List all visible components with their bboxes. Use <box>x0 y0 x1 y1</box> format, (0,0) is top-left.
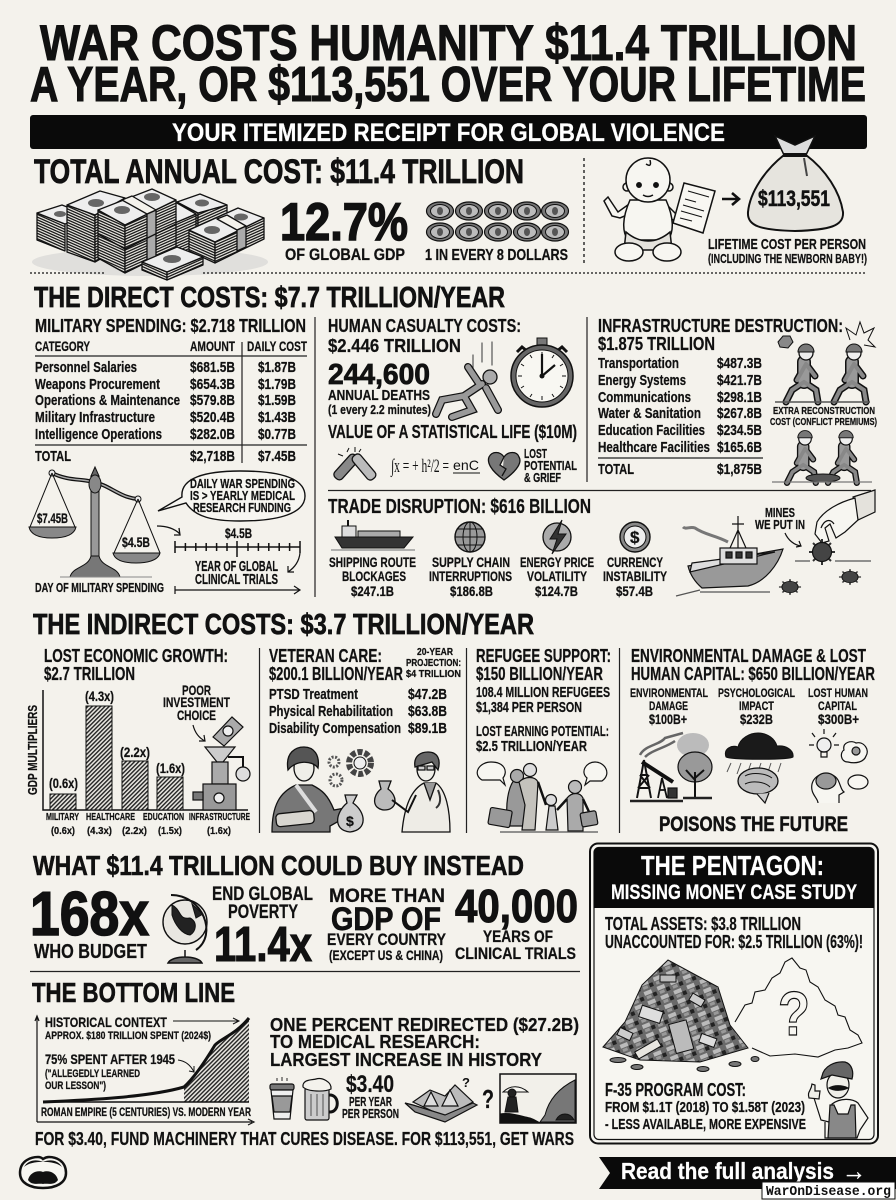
heading: bottom line: THE BOTTOM LINE <box>32 977 235 1008</box>
table: military spending breakdown: Personnel Salaries <box>35 359 137 376</box>
sub-stat: environmental damage: $100B+ <box>649 711 687 727</box>
caption: 1 in every 8 dollars: 1 IN EVERY 8 DOLLARS <box>425 247 568 264</box>
table: infrastructure costs: $421.7B <box>717 372 762 389</box>
text: F-35 program cost <box>605 1080 806 1133</box>
stat: $3.40 per year: PER YEAR <box>349 1095 392 1109</box>
table: infrastructure costs: Energy Systems <box>598 372 686 389</box>
callout: daily war spending: RESEARCH FUNDING <box>193 500 291 515</box>
caption: lost potential and grief: LOST <box>524 447 547 461</box>
heading: human casualty costs: $2.446 TRILLION <box>328 335 461 356</box>
table: military spending breakdown: Weapons Procurement <box>35 376 160 393</box>
stat: 168x WHO budget: 168x <box>30 880 149 949</box>
subtitle banner <box>30 115 867 149</box>
caption: lost potential and grief <box>524 447 577 485</box>
callout: poor investment choice: CHOICE <box>177 707 216 723</box>
chart: historical context curve <box>35 1014 254 1125</box>
table: infrastructure costs: $165.6B <box>717 439 762 456</box>
note: 20-year projection <box>406 647 461 680</box>
icon: stacks of money <box>32 189 268 280</box>
table: infrastructure costs: $1,875B <box>717 461 762 478</box>
table: military spending breakdown: $1.43B <box>258 409 296 426</box>
icon: currency coin: $ <box>630 528 640 547</box>
panel: military spending <box>29 315 307 595</box>
table: infrastructure costs: Healthcare Facilities <box>598 439 710 456</box>
list: veteran costs <box>269 686 447 737</box>
panel: human casualty costs <box>328 315 577 485</box>
callout: daily war spending: DAILY WAR SPENDING <box>190 476 295 491</box>
bar chart: GDP multipliers: (2.2x) <box>120 744 150 760</box>
heading: value of a statistical life: VALUE OF A STATISTICAL LIFE ($10M) <box>328 422 577 442</box>
chart: historical context curve: ROMAN EMPIRE (5 CENTURIES) VS. MODERN YEAR <box>41 1107 251 1119</box>
table: military spending breakdown: CATEGORY <box>35 338 90 354</box>
bar chart: GDP multipliers: (0.6x) <box>49 775 78 791</box>
note: 20-year projection: 20-YEAR <box>417 647 454 658</box>
stat: 40,000 years of trials: YEARS OF <box>483 928 553 946</box>
bar chart: GDP multipliers: (2.2x) <box>122 825 147 837</box>
text: energy price volatility: VOLATILITY <box>527 568 587 584</box>
icon: balance scale: $4.5B <box>122 535 150 550</box>
stats: refugees: 108.4 MILLION REFUGEES <box>476 684 610 701</box>
chart: historical context curve: OUR LESSON") <box>45 1080 106 1092</box>
icon: money bag: $113,551 <box>758 186 830 211</box>
takeaway line: FOR $3.40, FUND MACHINERY THAT CURES DISEASE. FOR $113,551, GET WARS <box>35 1129 574 1149</box>
heading: one percent redirected <box>270 1014 579 1070</box>
table: military spending breakdown <box>35 338 307 465</box>
table: military spending breakdown: $282.0B <box>190 426 235 443</box>
text: currency instability: CURRENCY <box>607 554 663 570</box>
table: military spending breakdown: DAILY COST <box>247 338 307 354</box>
table: infrastructure costs: Water & Sanitation <box>598 405 701 422</box>
icon: workers digging <box>772 431 872 483</box>
axis label: GDP multipliers: GDP MULTIPLIERS <box>25 705 40 795</box>
list: veteran costs: $47.2B <box>408 686 447 703</box>
callout: poor investment choice: POOR <box>182 682 211 698</box>
heading: one percent redirected: TO MEDICAL RESEARCH: <box>270 1031 480 1052</box>
text: shipping route blockages: BLOCKAGES <box>342 568 406 584</box>
heading: direct costs: THE DIRECT COSTS: $7.7 TRILLION/YEAR <box>34 282 505 314</box>
table: military spending breakdown: $1.79B <box>258 376 296 393</box>
stat: annual deaths: ANNUAL DEATHS <box>328 387 430 404</box>
panel: infrastructure destruction <box>598 315 877 483</box>
panel: Pentagon case study <box>590 844 878 1144</box>
icon: beer mug <box>303 1079 337 1120</box>
panel: lost economic growth <box>25 646 250 837</box>
icon: war scene <box>500 1074 576 1123</box>
icon: running workers and explosion <box>775 322 875 402</box>
bar chart: GDP multipliers: (1.6x) <box>207 825 231 837</box>
sub-stat: environmental damage <box>630 686 708 727</box>
table: military spending breakdown: $520.4B <box>190 409 235 426</box>
heading: veteran care: VETERAN CARE: <box>269 646 382 666</box>
icon: broken test tubes <box>332 447 377 482</box>
note: 20-year projection: PROJECTION: <box>406 658 461 669</box>
icon: pile of money <box>603 960 759 1072</box>
button: read the full analysis: → <box>842 1156 866 1186</box>
icon: missing pile outline <box>735 958 862 1057</box>
button: read the full analysis <box>599 1156 896 1189</box>
icon: nachos: ? <box>462 1075 470 1090</box>
text: shipping route blockages <box>329 554 416 599</box>
bar chart: GDP multipliers: INFRASTRUCTURE <box>189 811 250 823</box>
text: shipping route blockages: $247.1B <box>351 583 394 599</box>
timeline: year of clinical trials <box>175 525 300 594</box>
arrow: scale to timeline <box>157 526 180 535</box>
heading: what could buy: WHAT $11.4 TRILLION COULD BUY INSTEAD <box>33 850 524 881</box>
stat: 12.7 percent: OF GLOBAL GDP <box>285 245 405 264</box>
heading: refugee support: REFUGEE SUPPORT: <box>476 646 611 666</box>
table: infrastructure costs: Education Facilities <box>598 422 705 439</box>
stats: refugees <box>476 684 610 755</box>
table: military spending breakdown: $0.77B <box>258 426 296 443</box>
table: military spending breakdown: Intelligence Operations <box>35 426 162 443</box>
table: infrastructure costs: $234.5B <box>717 422 762 439</box>
table: infrastructure costs <box>598 355 763 478</box>
icon: refugee family <box>477 762 607 832</box>
sub-stat: psychological impact <box>718 686 795 727</box>
note: 20-year projection: $4 TRILLION <box>406 669 461 680</box>
stat: 40,000 years of trials <box>455 880 578 963</box>
text: energy price volatility <box>520 554 594 599</box>
panel: refugee support <box>476 646 611 832</box>
title <box>30 15 866 112</box>
list: veteran costs: PTSD Treatment <box>269 686 358 703</box>
heading: infrastructure destruction: $1.875 TRILLION <box>598 333 715 354</box>
icon: balance scale: $7.45B <box>37 511 68 526</box>
label: mines we put in: MINES <box>765 505 795 520</box>
list: veteran costs: Disability Compensation <box>269 720 401 737</box>
table: military spending breakdown: AMOUNT <box>190 338 235 354</box>
chart: historical context curve: HISTORICAL CONTEXT <box>45 1014 167 1030</box>
header: the Pentagon <box>594 848 874 908</box>
caption: poisons the future: POISONS THE FUTURE <box>659 813 848 836</box>
table: military spending breakdown: $2,718B <box>190 448 235 465</box>
list: veteran costs: $63.8B <box>408 703 447 720</box>
sub-stat: lost human capital: CAPITAL <box>818 699 857 713</box>
sub-stat: lost human capital <box>808 686 868 727</box>
bar chart: GDP multipliers: HEALTHCARE <box>86 811 135 823</box>
sub-stat: environmental damage: ENVIRONMENTAL <box>630 686 708 700</box>
stat: more than GDP <box>327 885 446 963</box>
bar chart: GDP multipliers: (1.5x) <box>158 825 182 837</box>
heading: infrastructure destruction <box>598 315 843 354</box>
panel: veteran care <box>269 646 461 832</box>
icon: currency coin <box>620 522 650 552</box>
caption: lost potential and grief: & GRIEF <box>524 471 561 485</box>
icon: oil rig and tree <box>630 733 712 801</box>
label: mines we put in <box>755 505 805 547</box>
icon: hand with mine <box>779 490 875 595</box>
panel: what $11.4 trillion could buy <box>30 850 578 972</box>
icon: globe <box>455 522 485 552</box>
icon: gears <box>329 752 371 786</box>
callout: daily war spending: IS > YEARLY MEDICAL <box>190 488 295 503</box>
stat: more than GDP: MORE THAN <box>329 885 445 907</box>
table: military spending breakdown: $7.45B <box>258 448 296 465</box>
icon: stopwatch <box>511 338 573 407</box>
arrow: baby to bag <box>722 193 739 205</box>
heading: military spending: MILITARY SPENDING: $2.718 TRILLION <box>35 315 306 336</box>
stat: $3.40 per year <box>342 1071 399 1121</box>
stats: assets: TOTAL ASSETS: $3.8 TRILLION <box>605 914 801 934</box>
text: currency instability: INSTABILITY <box>603 568 667 584</box>
icon: investment machine <box>193 717 250 810</box>
chart: historical context curve: APPROX. $180 TRILLION SPENT (2024$) <box>45 1030 211 1042</box>
heading: one percent redirected: LARGEST INCREASE IN HISTORY <box>270 1049 543 1070</box>
heading: veteran care <box>269 646 403 684</box>
icon: coffee cup <box>270 1077 294 1119</box>
heading: environmental damage <box>631 646 875 684</box>
icon: nachos <box>405 1075 477 1122</box>
table: infrastructure costs: $267.8B <box>717 405 762 422</box>
logo: binoculars <box>20 1157 66 1188</box>
heading: refugee support: $150 BILLION/YEAR <box>476 664 603 684</box>
bar chart: GDP multipliers: MILITARY <box>46 811 79 823</box>
stat: more than GDP: (EXCEPT US & CHINA) <box>329 948 443 963</box>
text: F-35 program cost: - LESS AVAILABLE, MORE EXPENSIVE <box>605 1117 806 1133</box>
stat: 12.7 percent: 12.7% <box>280 193 408 252</box>
icon: energy bolt <box>543 520 571 554</box>
icon: storm cloud over brain <box>725 733 793 803</box>
icon: baby with invoice <box>604 158 715 261</box>
caption: lifetime cost <box>708 236 867 266</box>
table: military spending breakdown: $654.3B <box>190 376 235 393</box>
icon: broken heart <box>488 452 520 480</box>
stat: end global poverty <box>212 884 313 972</box>
heading: human casualty costs <box>328 315 521 356</box>
panel: bottom line <box>32 977 579 1149</box>
icon: mechanic thumbs up <box>808 1062 868 1138</box>
text: currency instability: $57.4B <box>616 583 653 599</box>
label: mines we put in: WE PUT IN <box>755 517 805 532</box>
table: military spending breakdown: TOTAL <box>35 448 71 465</box>
stat: end global poverty: END GLOBAL <box>212 884 313 905</box>
icon: balance scale <box>29 467 160 577</box>
timeline: year of clinical trials: CLINICAL TRIALS <box>195 571 278 588</box>
chart: historical context curve: ("ALLEGEDLY LEARNED <box>45 1068 140 1080</box>
stat: end global poverty: POVERTY <box>228 902 298 923</box>
stats: refugees: $2.5 TRILLION/YEAR <box>476 739 587 755</box>
table: infrastructure costs: Communications <box>598 389 691 406</box>
sub-stat: psychological impact: $232B <box>740 711 773 727</box>
icon: desk globe <box>163 895 207 963</box>
bar chart: GDP multipliers <box>43 688 250 837</box>
table: military spending breakdown: $579.8B <box>190 392 235 409</box>
stat: 40,000 years of trials: CLINICAL TRIALS <box>455 945 576 963</box>
text: supply chain interruptions: INTERRUPTIONS <box>429 568 512 584</box>
caption: extra reconstruction cost <box>770 405 877 428</box>
stat: $3.40 per year: $3.40 <box>346 1071 394 1098</box>
sub-stat: psychological impact: PSYCHOLOGICAL <box>718 686 795 700</box>
icon: missing pile outline: ? <box>778 980 810 1049</box>
subtitle banner: YOUR ITEMIZED RECEIPT FOR GLOBAL VIOLENCE <box>172 119 725 147</box>
text: supply chain interruptions: SUPPLY CHAIN <box>432 554 510 570</box>
table: military spending breakdown: $1.59B <box>258 392 296 409</box>
stat: end global poverty: 11.4x <box>214 918 312 972</box>
heading: indirect costs: THE INDIRECT COSTS: $3.7 TRILLION/YEAR <box>33 609 534 641</box>
stat: $3.40 per year: PER PERSON <box>342 1107 399 1121</box>
icon: money bag <box>338 795 363 832</box>
timeline: year of clinical trials: YEAR OF GLOBAL <box>195 558 278 575</box>
text: F-35 program cost: F-35 PROGRAM COST: <box>605 1080 746 1100</box>
icon: bulbs and head <box>809 729 868 803</box>
bar chart: GDP multipliers: (0.6x) <box>51 825 75 837</box>
panel: environmental damage and lost human capital <box>630 646 875 836</box>
stats: refugees: $1,384 PER PERSON <box>476 699 582 716</box>
text: F-35 program cost: FROM $1.1T (2018) TO $1.58T (2023) <box>605 1100 805 1116</box>
text: shipping route blockages: SHIPPING ROUTE <box>329 554 416 570</box>
button: read the full analysis: Read the full analysis <box>621 1158 834 1184</box>
sub-stat: lost human capital: LOST HUMAN <box>808 686 868 700</box>
stat: annual deaths: (1 every 2.2 minutes) <box>328 402 431 417</box>
chart: historical context curve: 75% SPENT AFTER 1945 <box>45 1051 175 1067</box>
caption: lost potential and grief: POTENTIAL <box>524 459 577 473</box>
text: supply chain interruptions <box>429 554 512 599</box>
stat: annual deaths: 244,600 <box>328 359 430 391</box>
icon: falling person <box>436 342 498 417</box>
question mark: ? <box>482 1084 494 1114</box>
heading: lost economic growth: $2.7 TRILLION <box>44 664 135 684</box>
callout: daily war spending <box>158 471 305 521</box>
callout: poor investment choice: INVESTMENT <box>163 694 230 710</box>
table: military spending breakdown: Operations & Maintenance <box>35 392 180 409</box>
stats: assets <box>605 914 863 952</box>
list: veteran costs: Physical Rehabilitation <box>269 703 393 720</box>
stat: more than GDP: EVERY COUNTRY <box>327 931 446 949</box>
stat: more than GDP: GDP OF <box>331 901 441 937</box>
callout: poor investment choice <box>163 682 230 741</box>
bar chart: GDP multipliers: (1.6x) <box>156 760 185 776</box>
formula: ∫x = + h²/2 = <box>390 456 449 478</box>
bar chart: GDP multipliers: (4.3x) <box>87 825 112 837</box>
heading: trade disruption: TRADE DISRUPTION: $616 BILLION <box>328 496 591 518</box>
heading: total annual cost: TOTAL ANNUAL COST: $11.4 TRILLION <box>34 153 524 191</box>
panel: total annual cost <box>32 153 568 280</box>
icon: money bag: $ <box>346 813 354 829</box>
header: the Pentagon: THE PENTAGON: <box>641 850 824 881</box>
panel: lifetime cost per person <box>604 136 867 266</box>
caption: day of military spending: DAY OF MILITARY SPENDING <box>35 580 164 595</box>
table: military spending breakdown: $681.5B <box>190 359 235 376</box>
bar chart: GDP multipliers: EDUCATION <box>143 811 184 823</box>
text: currency instability <box>603 554 667 599</box>
icon: money bag <box>748 136 843 231</box>
table: infrastructure costs: $487.3B <box>717 355 762 372</box>
heading: refugee support <box>476 646 611 684</box>
sub-stat: lost human capital: $300B+ <box>818 711 859 727</box>
heading: lost economic growth: LOST ECONOMIC GROWTH: <box>44 646 228 666</box>
timeline: year of clinical trials: $4.5B <box>225 525 252 541</box>
table: infrastructure costs: TOTAL <box>598 461 634 478</box>
heading: one percent redirected: ONE PERCENT REDIRECTED ($27.2B) <box>270 1014 579 1035</box>
list: veteran costs: $89.1B <box>408 720 447 737</box>
sub-stat: psychological impact: IMPACT <box>739 699 775 713</box>
stat: 168x WHO budget: WHO BUDGET <box>34 941 147 963</box>
formula: enC <box>453 457 479 473</box>
icon: doctor with money bag <box>375 752 450 832</box>
bar chart: GDP multipliers: (4.3x) <box>85 688 114 704</box>
icon: injured soldier <box>272 747 348 832</box>
watermark: WarOnDisease.org: WarOnDisease.org <box>766 1185 891 1200</box>
table: infrastructure costs: Transportation <box>598 355 679 372</box>
stats: refugees: LOST EARNING POTENTIAL: <box>476 724 609 740</box>
stat: 40,000 years of trials: 40,000 <box>455 880 578 932</box>
icon: container ship <box>331 520 415 550</box>
icon: ten coins <box>426 202 568 241</box>
heading: human casualty costs: HUMAN CASUALTY COSTS: <box>328 315 521 336</box>
heading: veteran care: $200.1 BILLION/YEAR <box>269 664 403 684</box>
text: energy price volatility: ENERGY PRICE <box>520 554 594 570</box>
panel: trade disruption <box>328 490 875 599</box>
heading: lost economic growth <box>44 646 228 684</box>
table: military spending breakdown: $1.87B <box>258 359 296 376</box>
text: energy price volatility: $124.7B <box>535 583 578 599</box>
table: infrastructure costs: $298.1B <box>717 389 762 406</box>
icon: boat <box>676 516 783 596</box>
sub-stat: environmental damage: DAMAGE <box>649 699 688 713</box>
stat: annual deaths <box>328 359 431 417</box>
table: military spending breakdown: Military Infrastructure <box>35 409 155 426</box>
text: supply chain interruptions: $186.8B <box>450 583 493 599</box>
